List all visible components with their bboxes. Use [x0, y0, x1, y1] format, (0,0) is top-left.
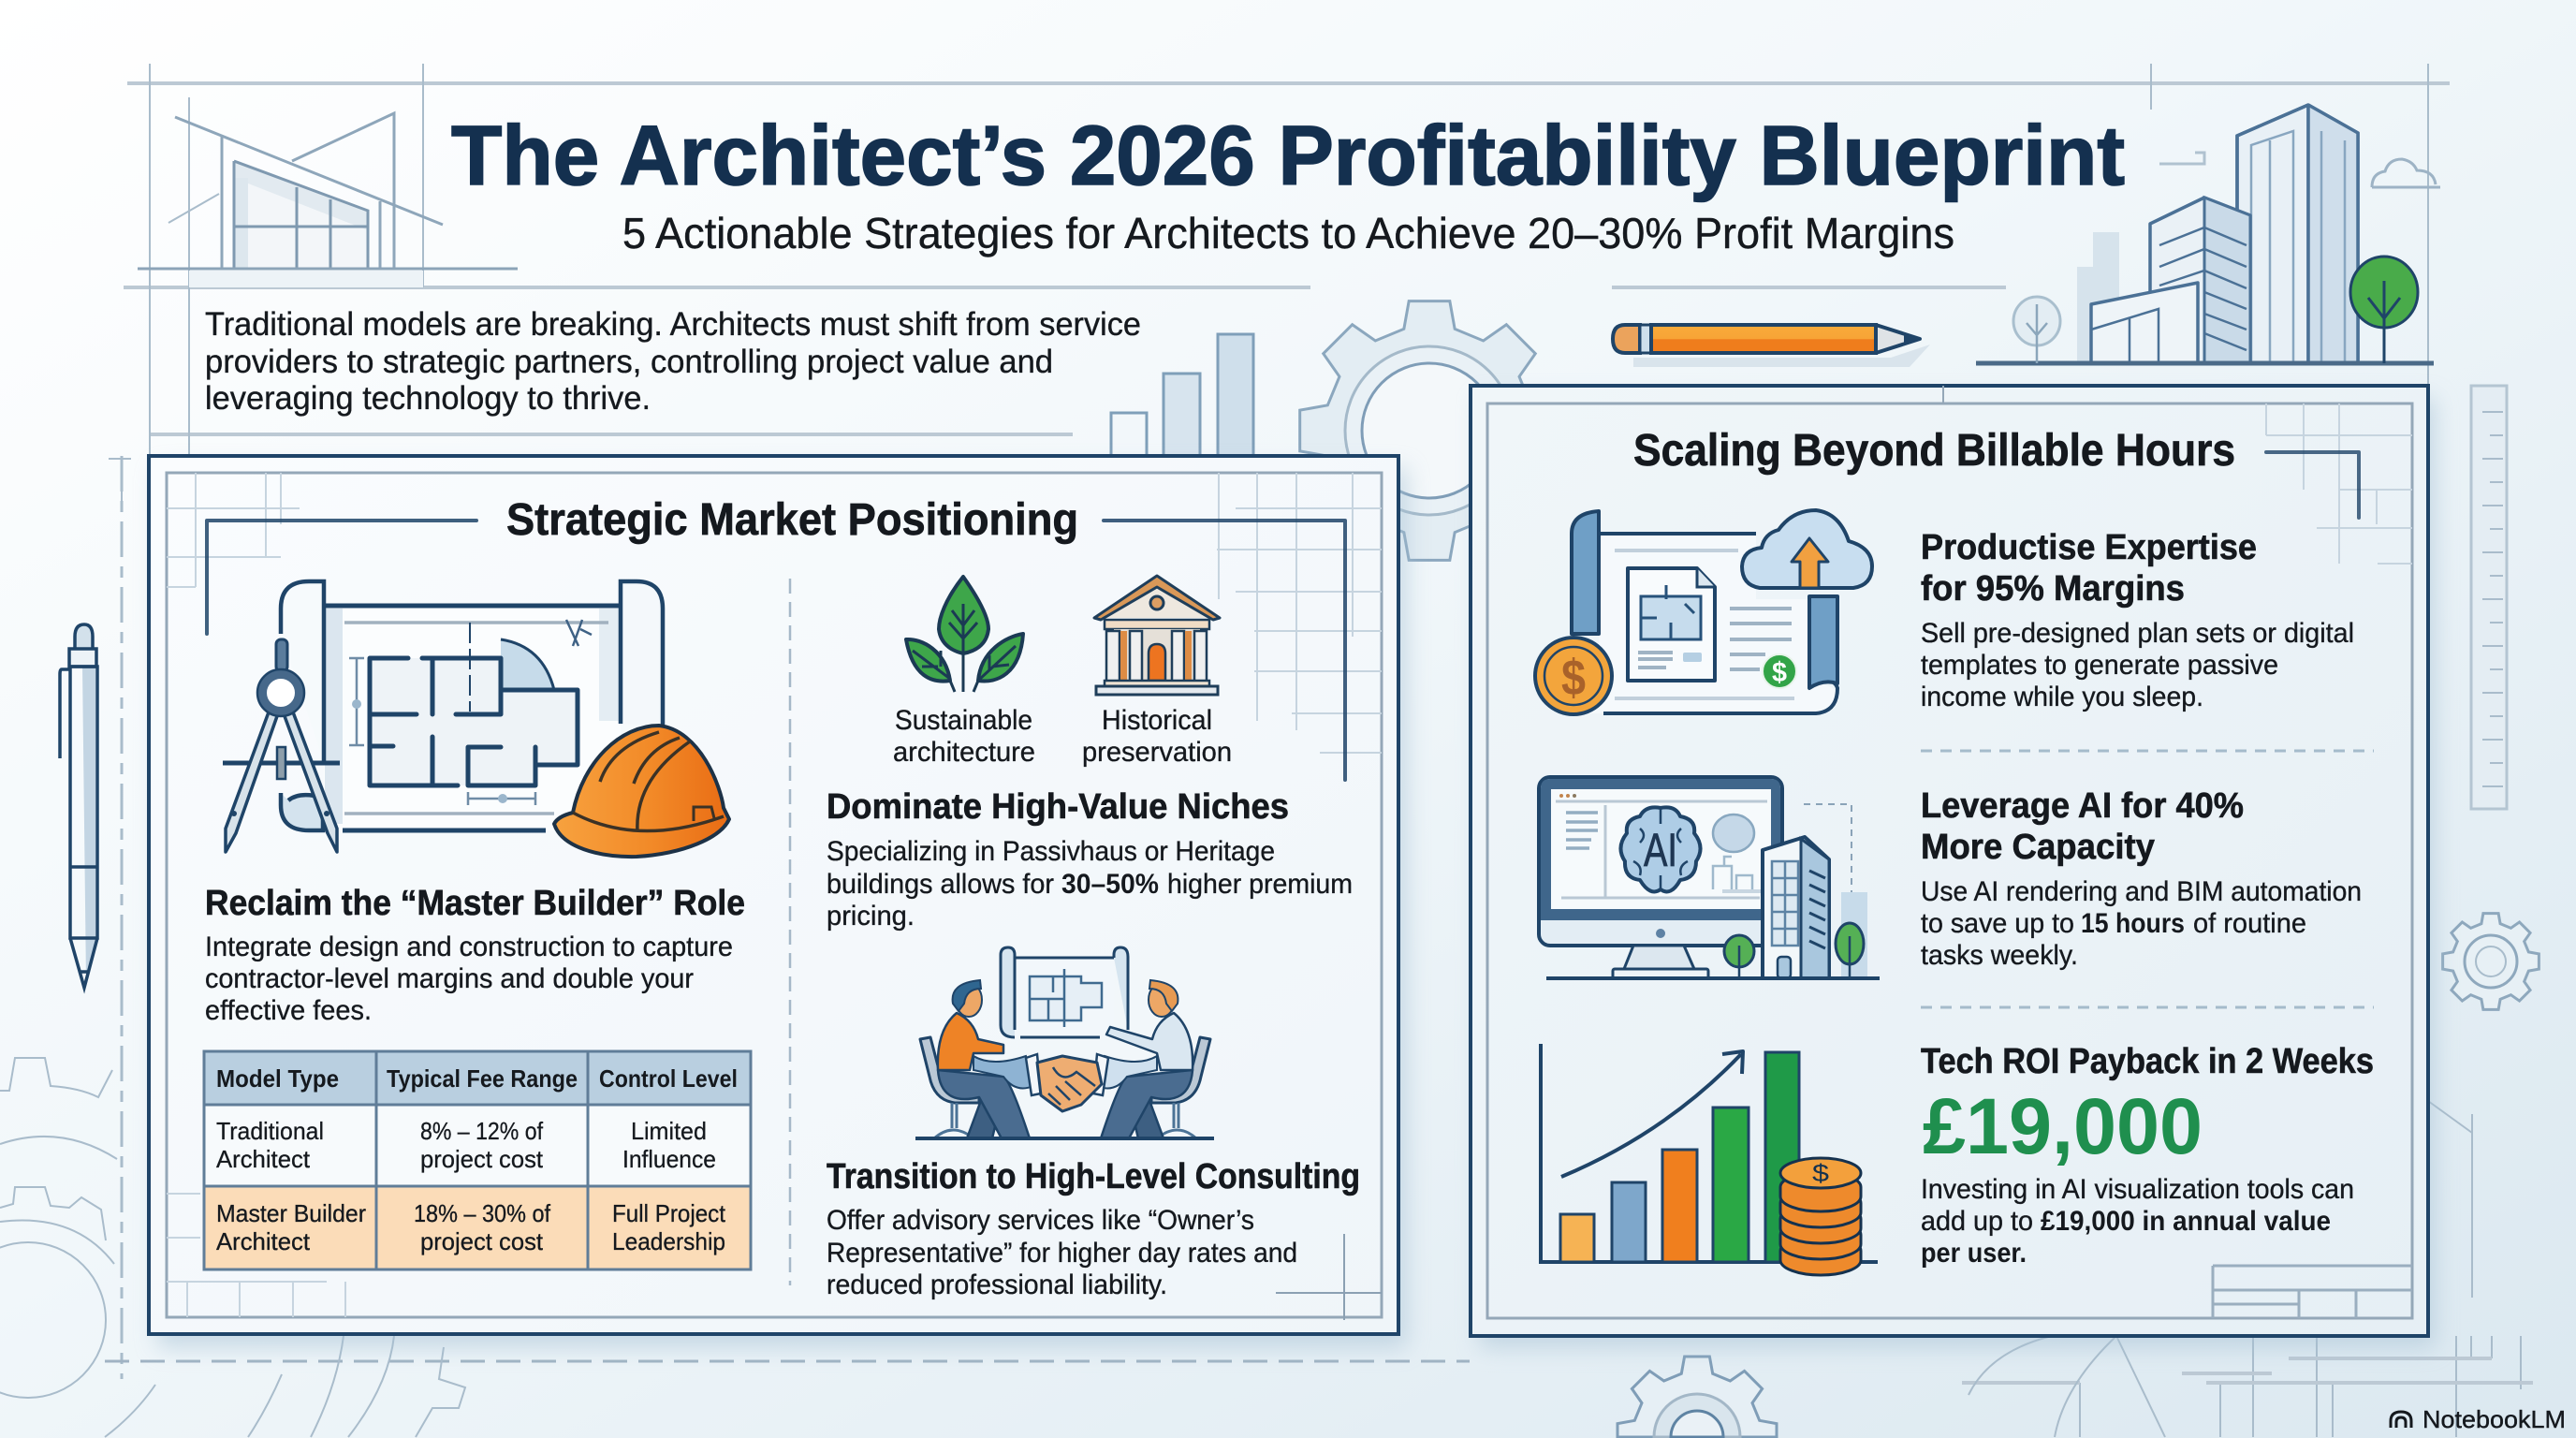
table: model comparison: 8% – 12% of [420, 1117, 544, 1145]
text: tech ROI body: £19,000 in annual value [2041, 1206, 2331, 1237]
icon: digital plan sets with cloud and coins: $ [1561, 650, 1586, 706]
table: model comparison: Master Builder [216, 1199, 366, 1227]
stat: 19000: £19,000 [1923, 1082, 2203, 1170]
icon: drafting compass [223, 639, 340, 852]
icon: background bar chart [1111, 334, 1253, 456]
text: sustainable architecture label: Sustainable [895, 705, 1032, 736]
icon: bottom gear [1617, 1357, 1777, 1437]
text: leverage AI body: 15 hours [2081, 908, 2185, 939]
text: productise body: income while you sleep. [1921, 682, 2203, 712]
text: niches body: pricing. [827, 901, 915, 932]
heading: productise expertise: Productise Expertise [1921, 528, 2257, 567]
subtitle: 5 Actionable Strategies for Architects to Achieve 20–30% Profit Margins [622, 209, 1954, 257]
text: niches body: buildings allows for [827, 869, 1054, 900]
intro text [205, 306, 1141, 417]
heading: productise expertise: for 95% Margins [1921, 569, 2185, 609]
icon: hard hat [554, 726, 729, 857]
table: model comparison: project cost [420, 1227, 544, 1255]
text: tech ROI body: add up to [1921, 1206, 2033, 1237]
text: reclaim body [205, 932, 733, 1026]
table: model comparison: Limited [631, 1117, 707, 1145]
heading: reclaim the master builder role: Reclaim the “Master Builder” Role [205, 884, 745, 923]
text: consulting body: reduced professional liability. [827, 1269, 1167, 1300]
text: productise body: templates to generate passive [1921, 650, 2278, 681]
heading: tech ROI: Tech ROI Payback in 2 Weeks [1921, 1042, 2374, 1081]
heading: dominate high-value niches: Dominate High-Value Niches [827, 787, 1289, 827]
table: model comparison: Influence [622, 1145, 716, 1173]
text: leverage AI body: Use AI rendering and BIM automation [1921, 876, 2362, 907]
text: leverage AI body: of routine [2193, 908, 2306, 939]
icon: historic building [1094, 576, 1220, 695]
text: leverage AI body: tasks weekly. [1921, 940, 2078, 971]
heading: transition to consulting: Transition to High-Level Consulting [827, 1157, 1360, 1196]
icon: left gears outline [0, 1058, 117, 1398]
title: The Architect’s 2026 Profitability Blueprint [451, 110, 2125, 203]
text: sustainable architecture label [893, 705, 1035, 768]
text: historical preservation label: Historical [1102, 705, 1212, 736]
table: model comparison: Architect [216, 1227, 311, 1255]
text: historical preservation label [1082, 705, 1232, 768]
text: tech ROI body [1921, 1174, 2354, 1269]
watermark: NotebookLM: NotebookLM [2422, 1405, 2566, 1433]
icon: consulting handshake [915, 947, 1214, 1138]
heading: scaling beyond billable hours: Scaling Beyond Billable Hours [1633, 426, 2235, 476]
table: model comparison: Leadership [612, 1227, 725, 1255]
text: niches body: 30–50% [1061, 869, 1159, 900]
text: consulting body [827, 1205, 1297, 1300]
table: model comparison: 18% – 30% of [414, 1199, 551, 1227]
text: niches body: Specializing in Passivhaus or Heritage [827, 836, 1275, 867]
table: model comparison: Control Level [599, 1064, 738, 1093]
text: consulting body: Offer advisory services like “Owner’s [827, 1205, 1254, 1236]
text: consulting body: Representative” for higher day rates and [827, 1238, 1297, 1269]
table: model comparison: Full Project [612, 1199, 726, 1227]
icon: right gear [2443, 914, 2539, 1009]
text: tech ROI body: Investing in AI visualization tools can [1921, 1174, 2354, 1205]
text: reclaim body: contractor-level margins and double your [205, 963, 694, 994]
icon: digital plan sets with cloud and coins [1535, 510, 1872, 714]
icon: city skyline [1976, 105, 2440, 363]
panel: strategic market positioning [149, 456, 1407, 1348]
icon: house sketch [138, 113, 518, 287]
heading: strategic market positioning: Strategic Market Positioning [506, 495, 1078, 545]
text: reclaim body: effective fees. [205, 995, 372, 1026]
table: model comparison [204, 1051, 751, 1269]
table: model comparison: Model Type [216, 1064, 339, 1093]
intro text: Traditional models are breaking. Architects must shift from service [205, 306, 1141, 343]
chart: rising bars with coins [1541, 1044, 1878, 1275]
heading: leverage AI [1921, 786, 2244, 867]
icon: blueprint scroll with floor plan [281, 581, 663, 830]
table: model comparison: Typical Fee Range [387, 1064, 578, 1093]
icon: large gear [1300, 301, 1559, 560]
text: historical preservation label: preservation [1082, 737, 1232, 768]
heading: productise expertise [1921, 528, 2257, 609]
chart: rising bars with coins: $ [1812, 1159, 1830, 1187]
text: sustainable architecture label: architecture [893, 737, 1035, 768]
text: leverage AI body [1921, 876, 2362, 971]
text: productise body [1921, 618, 2354, 712]
icon: mechanical pencil [60, 624, 97, 988]
icon: ruler [2471, 386, 2507, 809]
text: tech ROI body: per user. [1921, 1238, 2027, 1269]
text: niches body [827, 836, 1353, 932]
heading: leverage AI: Leverage AI for 40% [1921, 786, 2244, 826]
table: model comparison: Traditional [216, 1117, 324, 1145]
text: niches body: higher premium [1167, 869, 1353, 900]
text: leverage AI body: to save up to [1921, 908, 2074, 939]
text: productise body: Sell pre-designed plan sets or digital [1921, 618, 2354, 649]
intro text: leveraging technology to thrive. [205, 380, 651, 417]
icon: digital plan sets with cloud and coins: $ [1772, 657, 1787, 688]
icon: green leaves [906, 577, 1023, 692]
icon: orange pencil [1613, 325, 1930, 367]
table: model comparison: Architect [216, 1145, 311, 1173]
text: reclaim body: Integrate design and construction to capture [205, 932, 733, 962]
icon: AI monitor and building: AI [1644, 824, 1677, 876]
icon: AI monitor and building [1539, 777, 1880, 978]
heading: leverage AI: More Capacity [1921, 828, 2155, 867]
table: model comparison: project cost [420, 1145, 544, 1173]
panel: scaling beyond billable hours [1471, 386, 2436, 1348]
intro text: providers to strategic partners, controlling project value and [205, 344, 1053, 380]
